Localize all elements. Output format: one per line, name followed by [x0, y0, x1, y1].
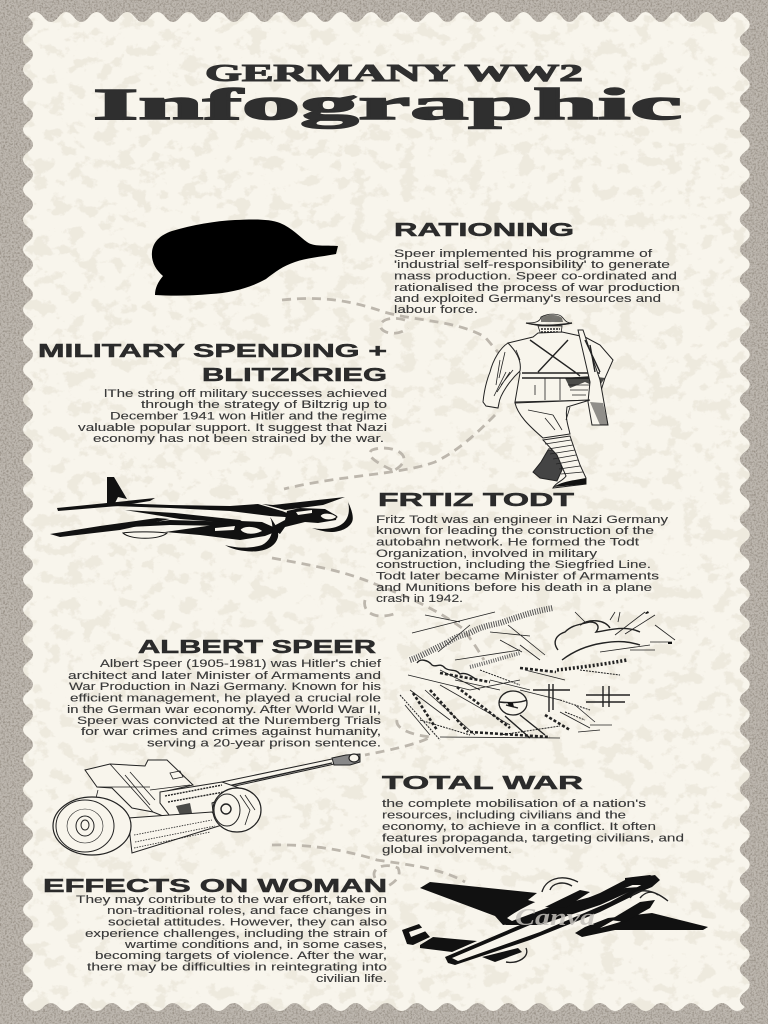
text: fritz todt: Fritz Todt was an engineer in Nazi Germany	[376, 514, 669, 526]
icon: walking soldier	[483, 314, 613, 488]
text: albert speer: in the German war economy. After World War II,	[67, 704, 381, 716]
text: rationing: and exploited Germany's resources and	[394, 293, 661, 305]
text: albert speer: Albert Speer (1905-1981) was Hitler's chief	[100, 658, 382, 670]
text: albert speer: Speer was convicted at the Nuremberg Trials	[77, 715, 382, 727]
illustration: trench battle sketch	[400, 608, 675, 740]
text: fritz todt: crash in 1942.	[376, 593, 463, 605]
text: fritz todt: known for leading the construction of the	[376, 525, 654, 537]
illustration: field gun	[53, 754, 360, 855]
heading: effects on woman: EFFECTS ON WOMAN	[43, 876, 387, 896]
panel: rationing	[394, 220, 680, 316]
text: albert speer: War Production in Nazi Germany. Known for his	[69, 681, 382, 693]
panel: military spending	[38, 341, 387, 445]
text: albert speer: architect and later Minister of Armaments and	[68, 670, 381, 682]
text: total war: features propaganda, targeting civilians, and	[382, 832, 684, 844]
icon: bomber plane silhouette	[402, 875, 708, 965]
text: military spending: December 1941 won Hitler and the regime	[110, 410, 387, 422]
text: military spending: lThe string off military successes achieved	[104, 388, 387, 400]
heading: rationing: RATIONING	[394, 220, 574, 240]
text: military spending	[78, 388, 387, 445]
text: total war	[382, 798, 684, 856]
text: effects on woman	[76, 894, 388, 985]
text: effects on woman: They may contribute to the war effort, take on	[76, 894, 387, 906]
text: effects on woman: societal attitudes. However, they can also	[108, 916, 387, 928]
title line: Infographic: Infographic	[93, 80, 682, 129]
heading: albert speer: ALBERT SPEER	[138, 637, 376, 657]
icon: helmet	[152, 219, 338, 296]
text: albert speer	[67, 658, 382, 750]
text: fritz todt	[376, 514, 669, 605]
text: rationing: rationalised the process of war production	[394, 282, 680, 294]
text: fritz todt: autobahn network. He formed the Todt	[376, 536, 639, 548]
icon: bomber plane silhouette: Canva	[515, 905, 595, 931]
text: effects on woman: becoming targets of violence. After the war,	[95, 950, 387, 962]
text: military spending: through the strategy of Biltzrig up to	[141, 399, 387, 411]
heading: total war: TOTAL WAR	[382, 773, 583, 793]
heading: military spending and blitzkrieg	[38, 341, 387, 385]
text: total war: resources, including civilians and the	[382, 810, 626, 822]
text: rationing: Speer implemented his programme of	[394, 248, 653, 260]
text: fritz todt: Todt later became Minister of Armaments	[376, 570, 660, 582]
text: rationing: mass production. Speer co-ordinated and	[394, 270, 677, 282]
text: fritz todt: and Munitions before his death in a plane	[376, 582, 652, 594]
text: rationing	[394, 248, 680, 316]
heading: military spending and blitzkrieg: BLITZKRIEG	[202, 365, 387, 385]
text: effects on woman: civilian life.	[316, 973, 387, 985]
panel: fritz todt	[376, 490, 669, 605]
panel: albert speer	[67, 637, 382, 750]
text: total war: global involvement.	[382, 844, 512, 856]
text: fritz todt: construction, including the Siegfried Line.	[376, 559, 651, 571]
icon: propeller bomber	[50, 477, 353, 551]
text: rationing: 'industrial self-responsibility' to generate	[394, 259, 670, 271]
text: effects on woman: non-traditional roles, and face changes in	[107, 905, 387, 917]
text: effects on woman: there may be difficulties in reintegrating into	[87, 962, 387, 974]
text: military spending: valuable popular support. It suggest that Nazi	[78, 422, 387, 434]
title line: Germany WW2: GERMANY WW2	[205, 61, 583, 87]
heading: fritz todt: FRTIZ TODT	[378, 490, 574, 510]
text: effects on woman: wartime conditions and, in some cases,	[124, 939, 387, 951]
text: albert speer: efficient management, he played a crucial role	[70, 692, 381, 704]
text: total war: economy, to achieve in a conflict. It often	[382, 821, 656, 833]
text: fritz todt: Organization, involved in military	[376, 548, 598, 560]
panel: total war	[382, 773, 684, 856]
text: military spending: economy has not been strained by the war.	[93, 433, 384, 445]
text: albert speer: serving a 20-year prison sentence.	[147, 738, 381, 750]
text: effects on woman: experience challenges, including the strain of	[85, 928, 388, 940]
text: total war: the complete mobilisation of a nation's	[382, 798, 647, 810]
dashed route lines	[272, 298, 507, 886]
text: rationing: labour force.	[394, 304, 478, 316]
text: albert speer: for war crimes and crimes against humanity,	[81, 726, 381, 738]
heading: military spending and blitzkrieg: MILITARY SPENDING +	[38, 341, 387, 361]
title	[93, 61, 682, 129]
panel: effects on woman	[43, 876, 388, 985]
